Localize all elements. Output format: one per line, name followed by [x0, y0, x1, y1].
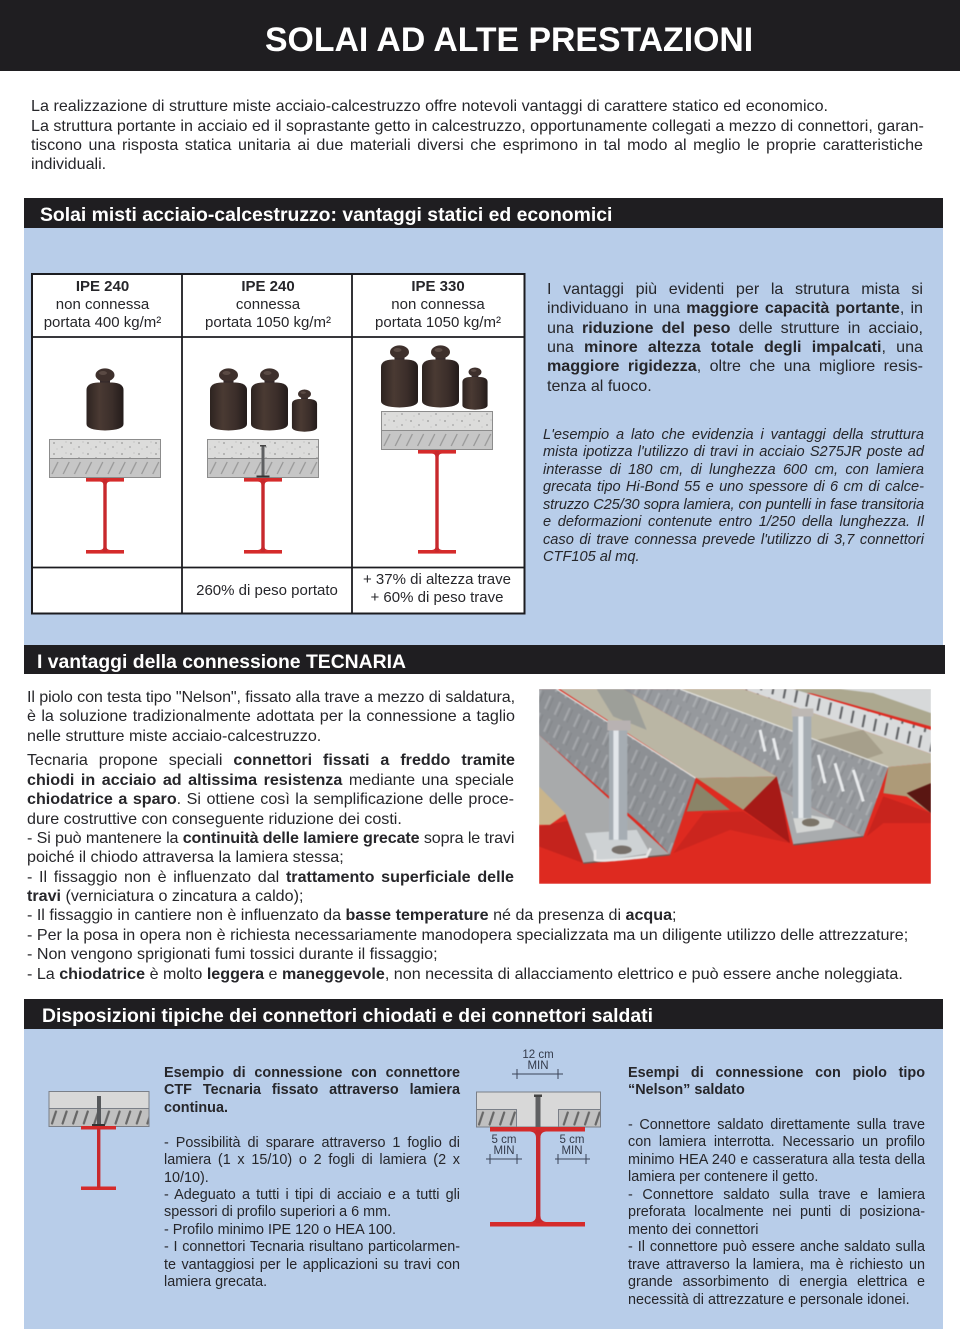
- diagram: welded stud with dimensions: MIN: [493, 1145, 515, 1157]
- example text italic: caso di trave connessa prevede l'utilizzo di 3,7 connettori: [543, 532, 924, 548]
- text: welded stud: trave attraverso la lamiera, ma è richiesto un: [628, 1257, 925, 1273]
- diagram: welded stud with dimensions: 5 cm: [492, 1134, 516, 1146]
- panel: typical connector arrangements: [24, 999, 943, 1329]
- connection text: - La chiodatrice è molto leggera e maneggevole, non necessita di allacciamento elettrico e può essere anche noleggiata.: [27, 965, 903, 983]
- column 1 header: [44, 278, 161, 331]
- result column 3: [363, 571, 511, 606]
- diagram: welded stud with dimensions: MIN: [561, 1145, 583, 1157]
- text: welded stud: preforata localmente nei punti di posiziona-: [628, 1204, 925, 1220]
- advantages text: una riduzione del peso delle strutture in acciaio,: [547, 319, 923, 337]
- diagram: welded stud with dimensions: MIN: [527, 1060, 549, 1072]
- diagram: welded stud with dimensions: 12 cm: [522, 1049, 554, 1061]
- icon: weight 1: [86, 368, 124, 430]
- example text italic: [543, 427, 924, 565]
- example text italic: mista ipotizza l'utilizzo di travi in acciaio S275JR poste ad: [543, 444, 924, 460]
- advantages text: tenza al fuoco.: [547, 377, 652, 395]
- text: nailed connector: lamiera grecata.: [164, 1274, 267, 1290]
- text: nailed connector: te vantaggiosi per le applicazioni su travi con: [164, 1257, 460, 1273]
- slab unconnected: [50, 440, 160, 478]
- text: welded stud: con lamiera interrotta. Necessario un profilo: [628, 1134, 925, 1150]
- heading: solai misti: [24, 198, 943, 228]
- advantages text: una minore altezza totale degli impalcati, una: [547, 338, 923, 356]
- beam 3: [418, 450, 456, 554]
- text: nailed connector: - Profilo minimo IPE 120 o HEA 100.: [164, 1222, 396, 1238]
- comparison table: [31, 273, 526, 614]
- intro text: La realizzazione di strutture miste acciaio-calcestruzzo offre notevoli vantaggi di carattere statico ed economico.: [31, 97, 828, 115]
- column 3 header: non connessa: [391, 296, 485, 313]
- connection text: Tecnaria propone speciali connettori fissati a freddo tramite: [27, 751, 515, 769]
- connection text: travi (verniciatura o zincatura a caldo);: [27, 887, 303, 905]
- column 3 header: IPE 330: [411, 278, 465, 295]
- text: welded stud: “Nelson” saldato: [628, 1082, 745, 1098]
- slab connected: [208, 440, 318, 478]
- intro text: La struttura portante in acciaio ed il soprastante getto in calcestruzzo, opportunamente collegati a mezzo di connettori, garan-: [31, 117, 924, 135]
- heading: vantaggi connessione: [24, 645, 945, 674]
- result column 2: 260% di peso portato: [196, 582, 338, 599]
- column 1 header: portata 400 kg/m²: [44, 314, 161, 331]
- advantages text: individuano in una maggiore capacità portante, in: [547, 299, 923, 317]
- connection text: [27, 688, 908, 983]
- title banner: [0, 0, 960, 71]
- heading: vantaggi connessione: I vantaggi della connessione TECNARIA: [37, 650, 406, 672]
- text: nailed connector: Esempio di connessione con connettore: [164, 1065, 460, 1081]
- text: welded stud: - Connettore saldato direttamente sulla trave: [628, 1117, 925, 1133]
- connection text: dure costruttive con conseguente riduzione dei costi.: [27, 810, 402, 828]
- photo: corrugated deck with connectors: [539, 689, 931, 884]
- heading: disposizioni tipiche: Disposizioni tipiche dei connettori chiodati e dei connettori saldati: [42, 1004, 653, 1026]
- column 2 header: [205, 278, 331, 331]
- connection text: - Non vengono sprigionati fumi tossici durante il fissaggio;: [27, 945, 438, 963]
- table grid and beam drawings: [31, 273, 526, 614]
- text: nailed connector: [164, 1065, 460, 1290]
- intro text: tiscono una risposta statica unitaria ai due materiali diversi che esprimono in tal modo al meglio le proprie caratteristiche: [31, 136, 923, 154]
- text: nailed connector: - I connettori Tecnaria risultano particolarmen-: [164, 1239, 460, 1255]
- connection text: è la soluzione tradizionalmente adottata per la connessione a taglio: [27, 707, 515, 725]
- intro text: [31, 97, 924, 173]
- column 1 header: non connessa: [56, 296, 149, 313]
- example text italic: struzzo C25/30 sopra lamiera, con puntelli in fase transitoria: [543, 497, 924, 513]
- text: nailed connector: CTF Tecnaria fissato attraverso lamiera: [164, 1082, 460, 1098]
- example text italic: e deformazioni contenute entro 1/250 della lunghezza. Il: [543, 514, 924, 530]
- connection text: - Il fissaggio non è influenzato dal trattamento superficiale delle: [27, 868, 514, 886]
- advantages text: I vantaggi più evidenti per la strutura mista si: [547, 280, 923, 298]
- example text italic: L'esempio a lato che evidenzia i vantaggi della struttura: [543, 427, 924, 443]
- text: nailed connector: spessori di profilo superiori a 6 mm.: [164, 1204, 391, 1220]
- connection text: - Il fissaggio in cantiere non è influenzato da basse temperature né da presenza di acqua;: [27, 906, 677, 924]
- connection text: chiodatrice a sparo. Si ottiene così la semplificazione delle proce-: [27, 790, 514, 808]
- diagram: welded stud with dimensions: [476, 1049, 601, 1226]
- text: nailed connector: continua.: [164, 1100, 228, 1116]
- connection text: chiodi in acciaio ad altissima resistenza mediante una speciale: [27, 771, 514, 789]
- intro text: individuali.: [31, 155, 106, 173]
- advantages text: maggiore rigidezza, oltre che una migliore resis-: [547, 357, 923, 375]
- text: nailed connector: - Possibilità di sparare attraverso 1 foglio di: [164, 1135, 460, 1151]
- connection text: nelle strutture miste acciaio-calcestruzzo.: [27, 727, 321, 745]
- heading: disposizioni tipiche: [24, 999, 943, 1029]
- text: welded stud: lamiera per contenere il getto.: [628, 1169, 818, 1185]
- connection text: poiché il chiodo attraversa la lamiera stessa;: [27, 848, 344, 866]
- icons: weights 3: [381, 345, 488, 410]
- text: welded stud: - Il connettore può essere anche saldato sulla: [628, 1239, 925, 1255]
- example text italic: interasse di 180 cm, di lunghezza 600 cm, con lamiera: [543, 462, 924, 478]
- text: welded stud: minimo HEA 240 e casseratura alla testa della: [628, 1152, 925, 1168]
- connection text: Il piolo con testa tipo "Nelson", fissato alla trave a mezzo di saldatura,: [27, 688, 515, 706]
- text: welded stud: Esempi di connessione con piolo tipo: [628, 1064, 925, 1080]
- column 3 header: portata 1050 kg/m²: [375, 314, 501, 331]
- panel: static and economic advantages: [24, 198, 943, 645]
- column 2 header: portata 1050 kg/m²: [205, 314, 331, 331]
- text: welded stud: [628, 1064, 925, 1308]
- connection text: - Per la posa in opera non è richiesta necessariamente manodopera specializzata ma un diligente utilizzo delle attrezzature;: [27, 926, 908, 944]
- column 1 header: IPE 240: [76, 278, 129, 295]
- text: welded stud: necessità di attrezzature e personale idonei.: [628, 1292, 910, 1308]
- column 2 header: IPE 240: [241, 278, 295, 295]
- text: welded stud: grande assorbimento di energia elettrica e: [628, 1274, 925, 1290]
- heading: solai misti: Solai misti acciaio-calcestruzzo: vantaggi statici ed economici: [40, 204, 612, 226]
- column 2 header: connessa: [236, 296, 300, 313]
- icons: weights 2: [210, 368, 317, 432]
- beam 2: [244, 478, 282, 554]
- example text italic: CTF105 al mq.: [543, 549, 640, 565]
- diagram: welded stud with dimensions: 5 cm: [560, 1134, 584, 1146]
- text: nailed connector: - Adeguato a tutti i tipi di acciaio e a tutti gli: [164, 1187, 460, 1203]
- slab IPE 330: [382, 412, 492, 450]
- example text italic: grecata tipo Hi-Bond 55 e uno spessore di 6 cm di calce-: [543, 479, 924, 495]
- advantages text: [547, 280, 923, 395]
- text: nailed connector: 10/10).: [164, 1170, 209, 1186]
- column 3 header: [375, 278, 501, 331]
- result column 3: + 37% di altezza trave: [363, 571, 511, 588]
- title banner: SOLAI AD ALTE PRESTAZIONI: [265, 21, 753, 59]
- text: nailed connector: lamiera (1 x 15/10) o 2 fogli di lamiera (2 x: [164, 1152, 460, 1168]
- text: welded stud: mento dei connettori: [628, 1222, 758, 1238]
- beam 1: [86, 478, 124, 554]
- text: welded stud: - Connettore saldato sulla trave e lamiera: [628, 1187, 925, 1203]
- result column 3: + 60% di peso trave: [370, 589, 504, 606]
- diagram: nailed connector: [48, 1091, 150, 1190]
- connection text: - Si può mantenere la continuità delle lamiere grecate sopra le travi: [27, 829, 514, 847]
